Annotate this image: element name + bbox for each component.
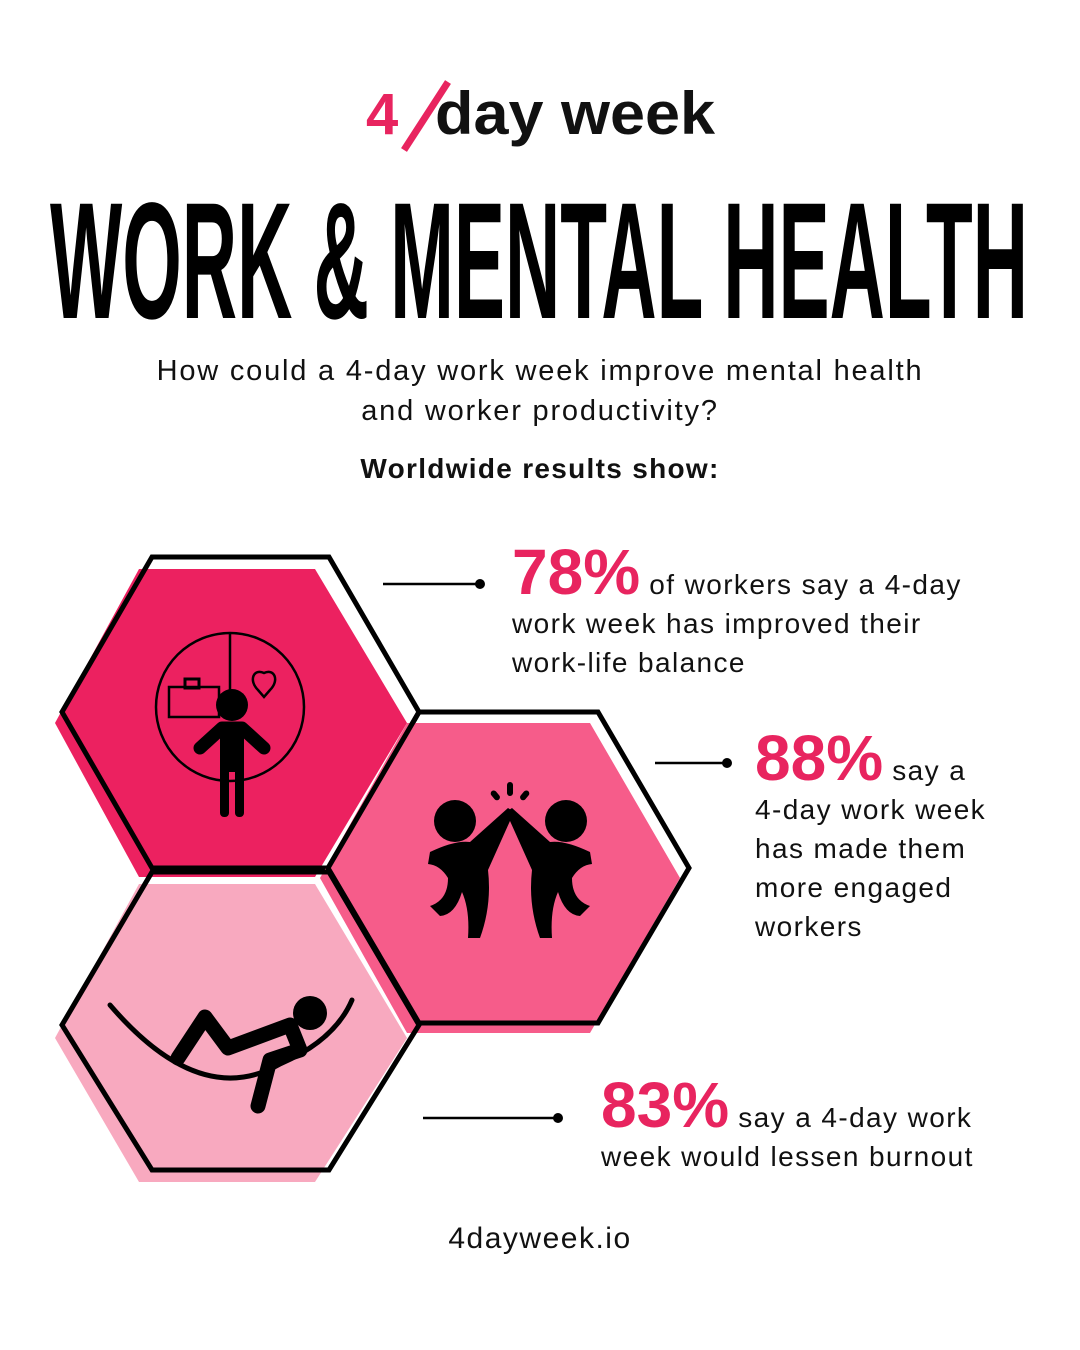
stat 1: work week has improved their <box>512 608 922 639</box>
logo: day week <box>435 80 716 147</box>
icon: high five <box>428 782 592 938</box>
stat 2: 4-day work week <box>755 794 986 825</box>
stat 1: work-life balance <box>512 647 746 678</box>
logo: 4 <box>366 82 398 147</box>
icon: hammock rest <box>110 996 352 1106</box>
footer url: 4dayweek.io <box>448 1222 632 1255</box>
hexagon 3: burnout <box>55 872 419 1182</box>
subtitle: and worker productivity? <box>361 395 719 427</box>
stat 2: has made them <box>755 833 966 864</box>
subtitle <box>157 355 923 427</box>
stat 2 <box>755 722 986 942</box>
connector 2 <box>655 758 732 768</box>
stat 2: 88% say a <box>755 722 966 794</box>
connector 3 <box>423 1113 563 1123</box>
stat 1 <box>512 536 962 678</box>
stat 2: workers <box>755 911 863 942</box>
stat 3: week would lessen burnout <box>601 1141 974 1172</box>
subtitle: How could a 4-day work week improve mental health <box>157 355 923 387</box>
stat 2: more engaged <box>755 872 952 903</box>
stat 1: 78% of workers say a 4-day <box>512 536 962 608</box>
connector 1 <box>383 579 485 589</box>
stat 3: 83% say a 4-day work <box>601 1069 972 1141</box>
icon: balance person <box>156 633 304 817</box>
stat 3 <box>601 1069 974 1172</box>
hexagon graphic <box>55 554 692 1182</box>
subheading: Worldwide results show: <box>360 453 720 484</box>
hexagon 1: work-life balance <box>55 557 419 877</box>
hexagon 2: engaged <box>320 712 689 1033</box>
